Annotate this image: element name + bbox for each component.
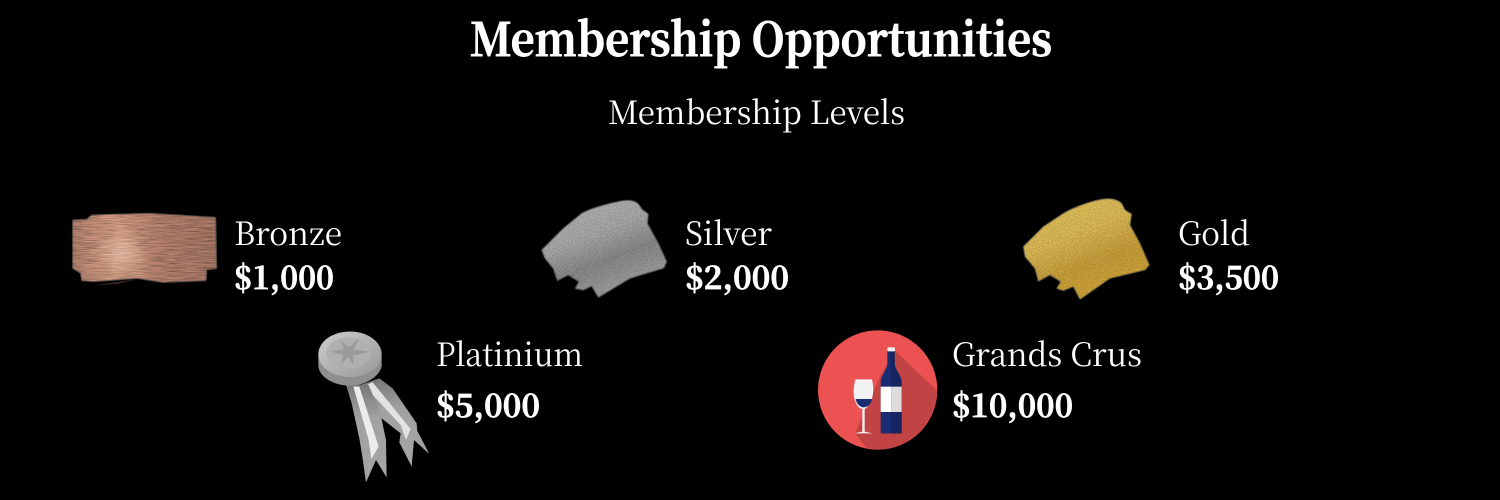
- icon: wine bottle and glass: [818, 330, 937, 450]
- medal face: [318, 332, 382, 377]
- price: silver: $2,000: [685, 253, 789, 299]
- level: platinium: [318, 330, 583, 482]
- wine glass: [854, 379, 873, 433]
- label: silver: Silver: [685, 209, 772, 255]
- price: bronze: $1,000: [234, 253, 334, 299]
- level: grands crus: [818, 330, 1142, 450]
- long shadow: [855, 351, 937, 450]
- icon: silver swatch: [542, 200, 667, 297]
- level: gold: [1023, 199, 1279, 299]
- red circle: [818, 330, 937, 450]
- price: gold: $3,500: [1178, 253, 1279, 299]
- label: gold: Gold: [1178, 209, 1250, 255]
- level: bronze: [73, 209, 342, 299]
- icon: gold swatch: [1023, 199, 1149, 299]
- label: grands crus: Grands Crus: [952, 330, 1142, 376]
- label: platinium: Platinium: [436, 330, 583, 376]
- icon: medal with ribbons: [318, 332, 429, 482]
- bottle: [881, 347, 902, 433]
- subtitle: Membership Levels: [608, 88, 905, 134]
- medal rim: [318, 332, 382, 386]
- medal star: [331, 338, 370, 365]
- icon: bronze swatch: [73, 213, 217, 285]
- ribbon: left tail: [346, 384, 387, 482]
- price: platinium: $5,000: [436, 381, 540, 427]
- price: grands crus: $10,000: [952, 381, 1073, 427]
- title: Membership Opportunities: [470, 4, 1052, 70]
- medal inner disc: [326, 337, 371, 369]
- label: bronze: Bronze: [234, 209, 342, 255]
- ribbon: right tail: [360, 378, 429, 467]
- level: silver: [542, 200, 789, 299]
